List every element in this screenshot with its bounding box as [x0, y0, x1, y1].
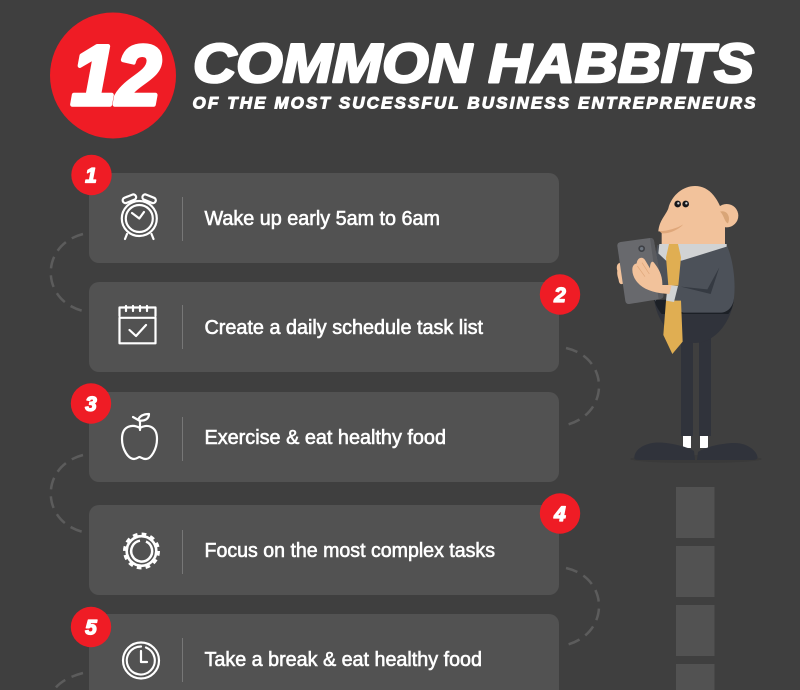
habit text: Wake up early 5am to 6am: [204, 208, 440, 230]
icon: apple: [122, 414, 157, 459]
fingers behind tablet: [617, 263, 624, 284]
shadow: [630, 455, 762, 463]
panel: habit 2: [89, 282, 559, 372]
icon: calendar: [120, 306, 156, 343]
habit text: Take a break & eat healthy food: [204, 649, 482, 671]
number badge 4: [540, 493, 580, 534]
panel: habit 3: [89, 392, 559, 482]
illustration: businessman with tablet: [617, 186, 762, 463]
dashed connector 4-5: [566, 568, 599, 645]
panel: habit 5: [89, 614, 559, 690]
icon: alarm clock: [122, 194, 157, 239]
number badge 4: 4: [553, 503, 566, 526]
subtitle: OF THE MOST SUCESSFUL BUSINESS ENTREPRENEURS: [192, 94, 756, 112]
mouth: [659, 224, 683, 233]
icon: gear: [126, 535, 158, 567]
hand: [632, 258, 672, 294]
decorative stack of blocks: [676, 487, 714, 690]
number badge 2: [540, 274, 580, 315]
trousers: [654, 298, 734, 343]
eyes: [674, 201, 681, 207]
number badge 1: [71, 155, 112, 195]
number badge 5: 5: [85, 616, 97, 640]
number badge 3: [71, 383, 111, 424]
icon: stopwatch clock: [123, 642, 159, 678]
habit text: Create a daily schedule task list: [204, 317, 483, 339]
dashed connector 3-4: [51, 455, 83, 532]
belt: [654, 298, 734, 314]
title badge: [50, 12, 176, 138]
sleeve crease: [681, 267, 719, 294]
ear: [715, 204, 738, 227]
head: [658, 186, 725, 244]
title badge: 12: [71, 28, 161, 122]
habit text: Exercise & eat healthy food: [204, 427, 446, 449]
jacket: [655, 245, 735, 313]
panel: habit 4: [89, 505, 559, 595]
number badge 5: [71, 607, 111, 647]
cuff: [666, 285, 678, 302]
socks: [683, 436, 708, 448]
panel: habit 1: [89, 173, 559, 263]
dashed connector 2-3: [566, 348, 599, 425]
legs: [681, 330, 711, 436]
number badge 2: 2: [553, 284, 566, 307]
dashed connector 1-2: [51, 234, 83, 311]
tie: [663, 243, 683, 354]
tablet camera: [638, 245, 645, 252]
number badge 3: 3: [85, 393, 97, 416]
shoes: [634, 442, 758, 460]
title: COMMON HABBITS: [193, 32, 754, 94]
dashed connector 5-6: [48, 673, 83, 690]
upper body: [617, 186, 738, 354]
number badge 1: 1: [85, 164, 97, 188]
habit text: Focus on the most complex tasks: [204, 540, 495, 562]
shirt collar: [658, 244, 727, 261]
tablet: [617, 238, 663, 304]
